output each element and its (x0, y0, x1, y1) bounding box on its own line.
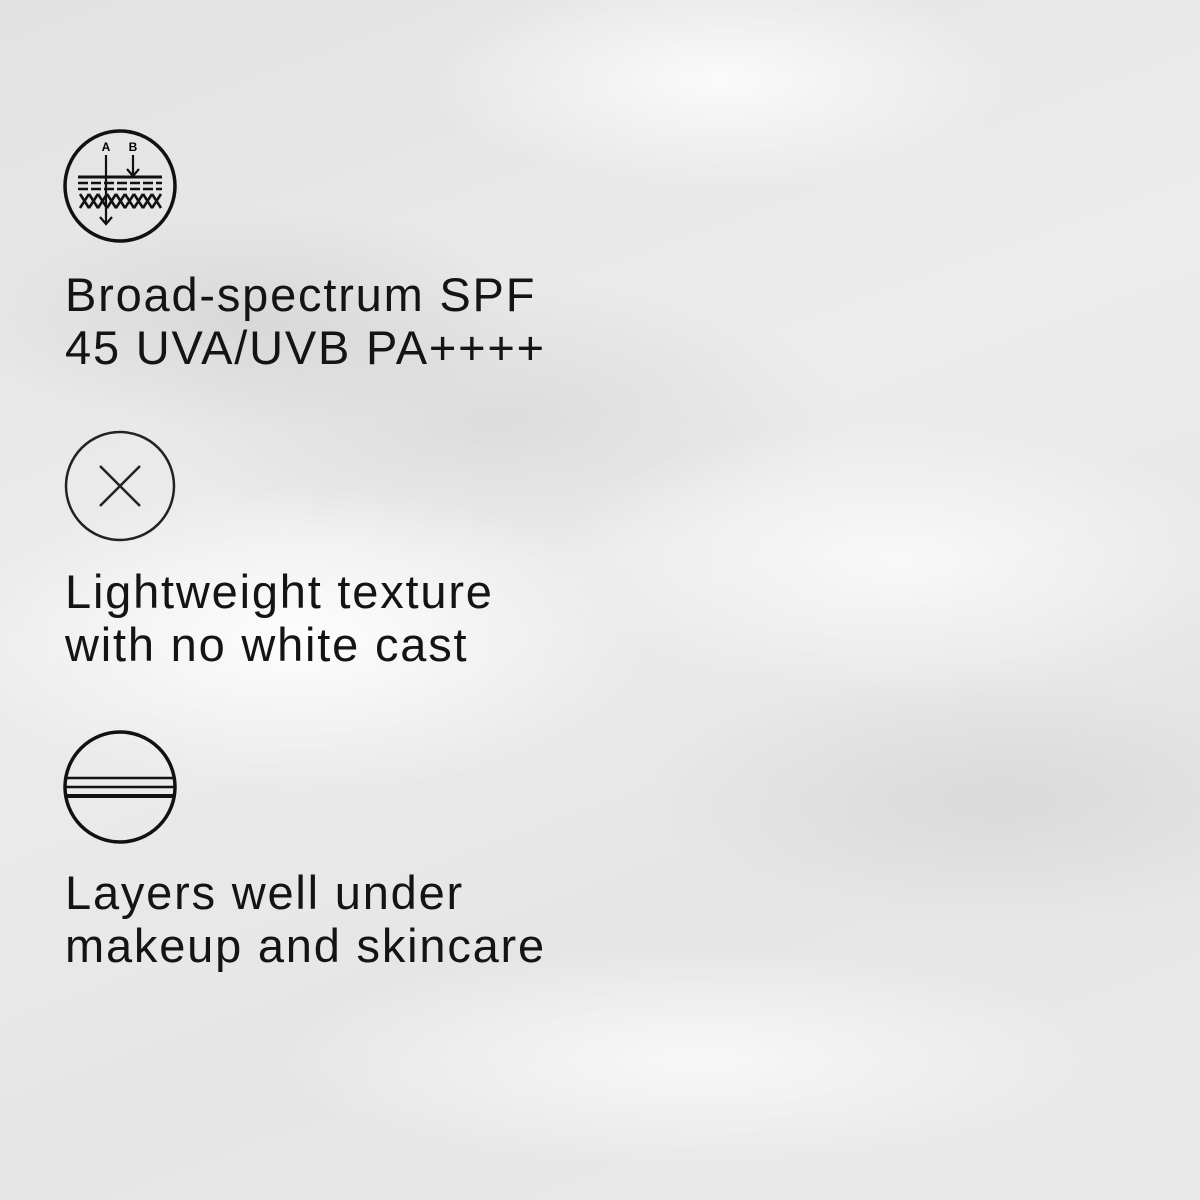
text: broad spectrum (65, 268, 546, 374)
text: broad spectrum: Broad-spectrum SPF (65, 268, 536, 321)
text: layers well: makeup and skincare (65, 919, 546, 972)
icon: layers (63, 730, 177, 844)
icon: UVA/UVB skin layers: B (129, 140, 138, 154)
icon: UVA/UVB skin layers (63, 129, 177, 243)
text: broad spectrum: 45 UVA/UVB PA++++ (65, 321, 546, 374)
text: layers well (65, 866, 546, 972)
text: layers well: Layers well under (65, 866, 464, 919)
icon: no white cast (64, 430, 176, 542)
icon: UVA/UVB skin layers: A (102, 140, 111, 154)
text: lightweight: Lightweight texture (65, 565, 494, 618)
text: lightweight: with no white cast (65, 618, 468, 671)
text: lightweight (65, 565, 494, 671)
